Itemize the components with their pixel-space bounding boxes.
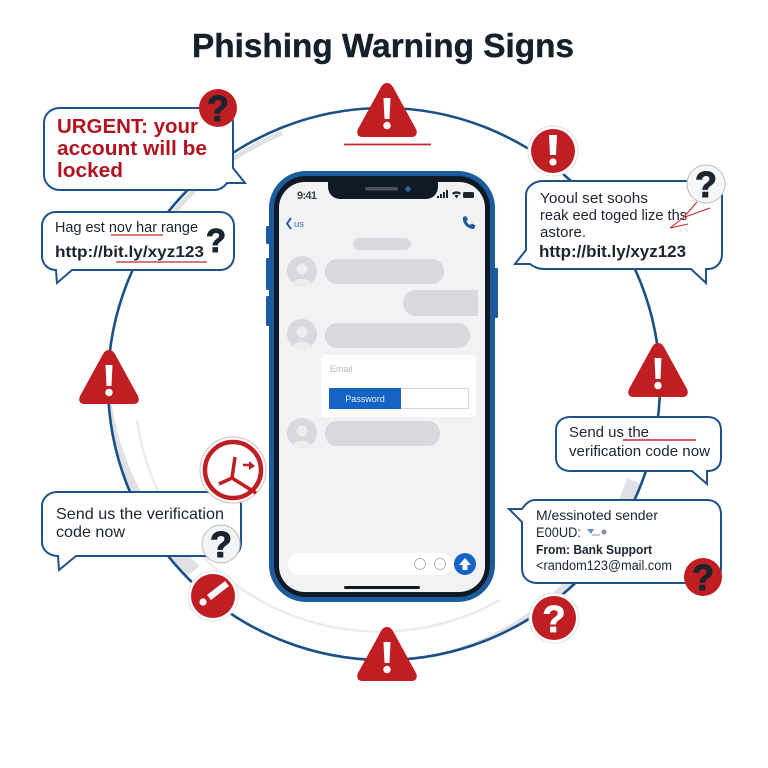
home indicator bbox=[344, 586, 420, 589]
icon: red question badge bbox=[199, 88, 237, 129]
icon: tiny glyphs bbox=[587, 529, 606, 536]
phone notch bbox=[328, 180, 438, 199]
phone body bbox=[269, 171, 495, 602]
callout: verification left bbox=[42, 492, 241, 570]
icon: phone call bbox=[463, 216, 476, 229]
avatar 3 bbox=[287, 418, 317, 448]
icon: dark question mark: ? bbox=[206, 222, 226, 259]
callout: suspicious link: Hag est nov har range bbox=[55, 219, 198, 236]
status bar: 9:41 bbox=[297, 190, 317, 202]
back link bbox=[287, 218, 304, 230]
icon: red exclamation circle bbox=[528, 126, 578, 176]
icon: question badge bbox=[202, 524, 240, 565]
callout: verification left: code now bbox=[56, 524, 125, 541]
icon: red question badge bbox=[684, 557, 722, 598]
callout: urgent: account will be bbox=[57, 137, 207, 160]
back link: us bbox=[294, 219, 304, 230]
icon: question badge with arrows bbox=[670, 164, 725, 228]
icon: red clock symbol bbox=[200, 437, 266, 503]
icon: top warning triangle bbox=[344, 83, 431, 144]
title: Phishing Warning Signs bbox=[192, 27, 574, 64]
callout: verification right: verification code now bbox=[569, 443, 710, 460]
warning ring bbox=[108, 108, 660, 660]
icon: red question circle bottom right: ? bbox=[542, 599, 566, 641]
callout: verification right bbox=[556, 417, 721, 484]
callout: store link bbox=[515, 164, 725, 283]
callout: store link: http://bit.ly/xyz123 bbox=[539, 243, 686, 261]
callout: urgent bbox=[44, 88, 245, 190]
icon: right warning triangle bbox=[628, 343, 688, 397]
callout: mismatched sender: M/essinoted sender bbox=[536, 508, 659, 523]
icon: red question badge: ? bbox=[207, 88, 229, 129]
phone screen bbox=[279, 182, 485, 592]
callout: store link: Yooul set soohs bbox=[540, 190, 648, 207]
message placeholder top bbox=[353, 238, 411, 250]
callout: urgent: URGENT: your bbox=[57, 115, 198, 138]
callout: suspicious link: http://bit.ly/xyz123 bbox=[55, 244, 204, 261]
message bubble 1 bbox=[325, 259, 444, 284]
callout: urgent: locked bbox=[57, 159, 123, 182]
login form bbox=[321, 355, 476, 417]
icon: bottom warning triangle bbox=[357, 627, 417, 681]
icon: red question badge: ? bbox=[692, 557, 714, 598]
callout: verification right: Send us the bbox=[569, 424, 649, 441]
message bubble 2 bbox=[403, 290, 478, 316]
callout: mismatched sender: E00UD: bbox=[536, 525, 581, 540]
login form: Password bbox=[345, 394, 385, 404]
phone bbox=[266, 171, 498, 602]
avatar 1 bbox=[287, 256, 317, 286]
login form: Email bbox=[330, 364, 353, 374]
phone side buttons bbox=[266, 226, 498, 326]
status bar bbox=[297, 190, 474, 202]
icon: question badge: ? bbox=[210, 524, 232, 565]
icon: question badge with arrows: ? bbox=[695, 164, 717, 205]
message bubble 4 bbox=[325, 421, 440, 446]
callout: store link: reak eed toged lize ths bbox=[540, 207, 687, 224]
callout: store link: astore. bbox=[540, 224, 586, 241]
callout: suspicious link bbox=[42, 212, 234, 283]
callout: mismatched sender: <random123@mail.com bbox=[536, 558, 672, 573]
callout: mismatched sender bbox=[509, 500, 722, 598]
callout: mismatched sender: From: Bank Support bbox=[536, 542, 653, 557]
message bubble 3 bbox=[325, 323, 470, 348]
message input bbox=[288, 553, 476, 575]
icon: tilted exclamation circle bbox=[188, 571, 238, 621]
icon: red question circle bottom right bbox=[529, 593, 579, 643]
avatar 2 bbox=[287, 319, 317, 349]
icon: left warning triangle bbox=[79, 350, 139, 404]
callout: verification left: Send us the verification bbox=[56, 506, 224, 523]
